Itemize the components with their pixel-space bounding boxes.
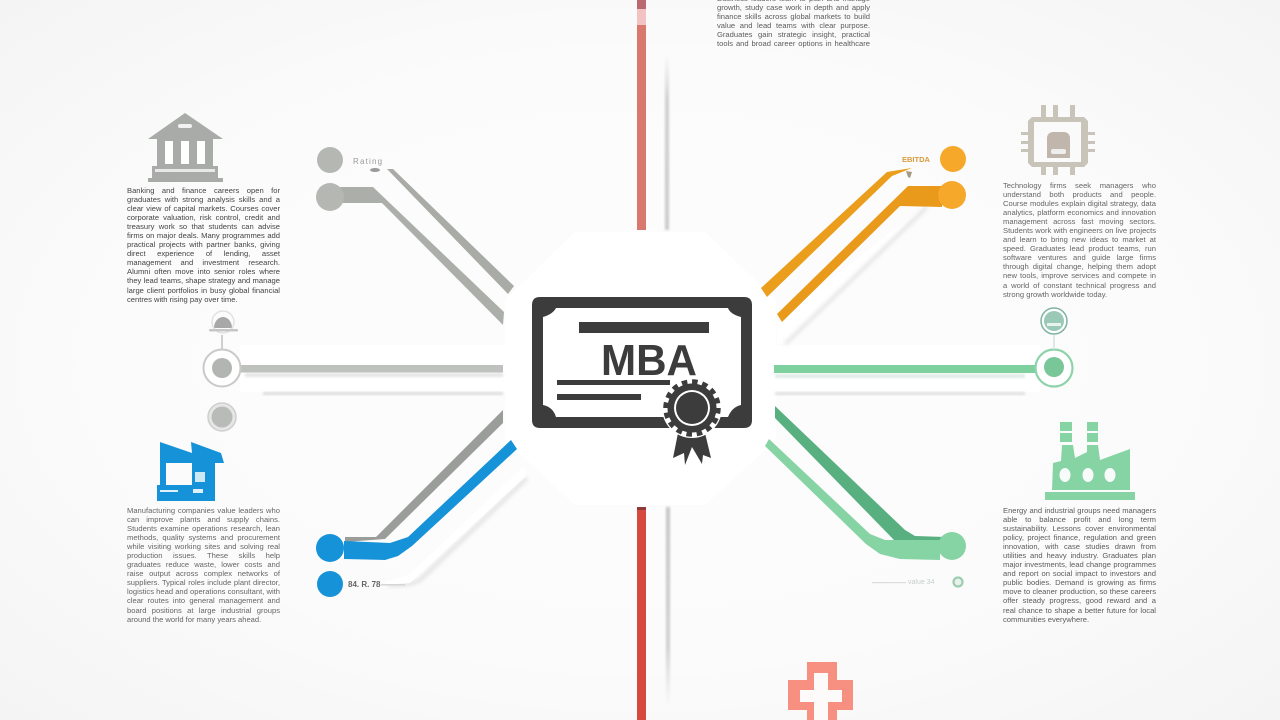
label: orange top connector: EBITDA bbox=[902, 155, 930, 164]
icon: blue factory bbox=[157, 442, 224, 501]
icon: bank bbox=[148, 113, 223, 182]
icon: chip bbox=[1021, 105, 1095, 175]
connector: grey top-left bbox=[316, 147, 514, 325]
label: green bottom connector: value 34 bbox=[908, 579, 934, 586]
bottom red vertical line bbox=[637, 507, 670, 720]
panel: white hub behind certificate bbox=[240, 231, 1040, 505]
connector: blue bottom-left bbox=[316, 410, 527, 597]
certificate text line one bbox=[557, 380, 670, 385]
icon: teal badge bbox=[1041, 308, 1067, 334]
text block: manufacturing: Manufacturing companies value leaders who can improve plants and supply chains. Students examine operations research, lean methods, quality systems and procurement while visiting working sites and solving real production issues. These skills help graduates reduce waste, lower costs and raise output across complex networks of suppliers. Typical roles include plant director, logistics head and operations consultant, with clear routes into general management and board positions at large industrial groups around the world for many years ahead. bbox=[127, 506, 280, 624]
connector: green bottom-right bbox=[765, 406, 966, 586]
connector: grey middle-left bbox=[204, 335, 503, 395]
label: blue bottom connector: 84. R. 78 bbox=[348, 580, 380, 589]
icon: medical cross bbox=[788, 662, 853, 720]
label: grey top connector: Rating bbox=[353, 157, 383, 166]
icon: grey hat bbox=[209, 311, 238, 333]
text block: technology: Technology firms seek managers who understand both products and people. Course modules explain digital strategy, data analytics, platform economics and innovation management across fast moving sectors. Students work with engineers on live projects and learn to bring new ideas to market at speed. Graduates lead product teams, run software ventures and guide large firms through digital change, helping them adopt new tools, improve services and compete in a world of constant technical progress and strong growth worldwide today. bbox=[1003, 181, 1156, 299]
top red vertical line bbox=[637, 0, 669, 230]
seal gear bbox=[662, 378, 722, 438]
certificate text line two bbox=[557, 394, 641, 400]
certificate with MBA seal bbox=[532, 297, 752, 465]
icon: green factory bbox=[1045, 422, 1135, 500]
seal ribbon bbox=[673, 433, 711, 465]
certificate title bar bbox=[579, 322, 709, 333]
connector: orange top-right bbox=[761, 146, 966, 344]
icon: grey circle badge bbox=[208, 403, 236, 431]
certificate heading MBA: MBA bbox=[601, 336, 697, 385]
text block: energy and industry: Energy and industrial groups need managers able to balance profit and long term sustainability. Lessons cover environmental policy, project finance, regulation and green innovation, with case studies drawn from utilities and heavy industry. Graduates plan major investments, lead change programmes and report on social impact to investors and public bodies. Demand is growing as firms move to cleaner production, so these careers offer steady progress, good reward and a real chance to shape a better future for local communities everywhere. bbox=[1003, 506, 1156, 624]
connector: green middle-right bbox=[774, 335, 1072, 395]
text block: banking: Banking and finance careers open for graduates with strong analysis skills and a clear view of capital markets. Courses cover corporate valuation, risk control, credit and treasury work so that students can advise firms on major deals. Many programmes add practical projects with partner banks, giving direct experience of lending, asset management and investment research. Alumni often move into senior roles where they lead teams, shape strategy and manage large client portfolios in busy global financial centres with rising pay over time. bbox=[127, 186, 280, 304]
